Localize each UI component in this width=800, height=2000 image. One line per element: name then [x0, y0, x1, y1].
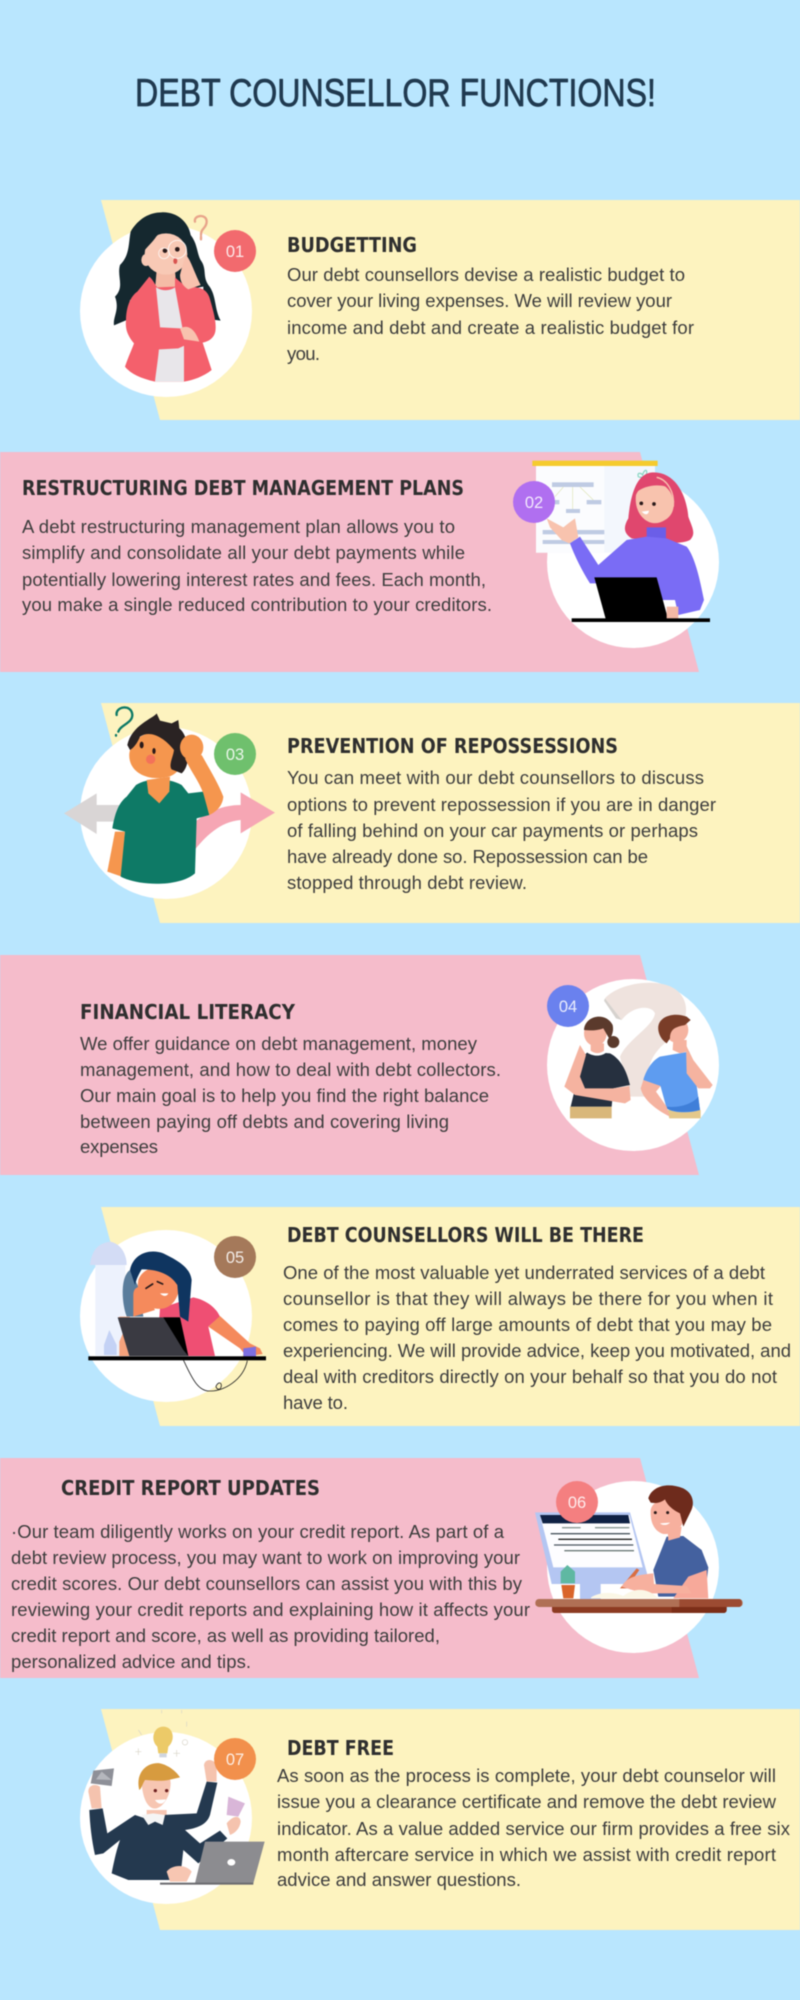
badge 01: 01 [226, 243, 244, 261]
badge 03 [214, 733, 256, 775]
heading: BUDGETTING [287, 233, 417, 257]
white circle [80, 727, 252, 899]
badge 07: 07 [226, 1751, 244, 1769]
body text [287, 264, 694, 364]
body text: expenses [80, 1136, 158, 1157]
body text: issue you a clearance certificate and remove the debt review [277, 1791, 777, 1812]
icon: multitasking man [88, 1710, 265, 1885]
panel: financial literacy [0, 955, 719, 1175]
white circle [547, 476, 719, 648]
icon: boy at crossroads [64, 707, 275, 884]
body text [283, 1262, 791, 1413]
body text: credit report and score, as well as providing tailored, [11, 1625, 440, 1646]
heading: CREDIT REPORT UPDATES [61, 1476, 320, 1500]
heading: PREVENTION OF REPOSSESSIONS [287, 734, 618, 758]
body text: credit scores. Our debt counsellors can assist you with this by [11, 1573, 523, 1594]
body text [277, 1765, 791, 1890]
panel: credit report updates [0, 1458, 743, 1678]
panel background [101, 703, 800, 923]
panel: restructuring [0, 452, 719, 672]
body text: month aftercare service in which we assist with credit report [277, 1844, 776, 1865]
body text: you make a single reduced contribution to your creditors. [22, 594, 492, 615]
badge 07 [214, 1738, 256, 1780]
panel background [101, 200, 800, 420]
body text: stopped through debt review. [287, 872, 527, 893]
panel background [0, 452, 699, 672]
body text [22, 516, 492, 615]
panel background [101, 1709, 800, 1930]
body text: reviewing your credit reports and explaining how it affects your [11, 1599, 530, 1620]
badge 01 [214, 230, 256, 272]
body text: debt review process, you may want to work on improving your [11, 1547, 520, 1568]
badge 04 [547, 985, 589, 1027]
panel background [101, 1207, 800, 1426]
heading: DEBT FREE [287, 1736, 394, 1760]
panel background [0, 955, 699, 1175]
white circle [547, 979, 719, 1151]
body text: counsellor is that they will always be there for you when it [283, 1288, 773, 1309]
body text: between paying off debts and covering living [80, 1111, 449, 1132]
badge 06 [556, 1481, 598, 1523]
body text: deal with creditors directly on your behalf so that you do not [283, 1366, 777, 1387]
icon: two people with question mark [564, 983, 713, 1118]
body text: Our debt counsellors devise a realistic budget to [287, 264, 685, 285]
body text: income and debt and create a realistic budget for [287, 317, 694, 338]
body text: ·Our team diligently works on your credit report. As part of a [11, 1521, 505, 1542]
body text: potentially lowering interest rates and fees. Each month, [22, 569, 486, 590]
badge 04: 04 [559, 998, 577, 1016]
heading: FINANCIAL LITERACY [80, 1000, 295, 1024]
body text: personalized advice and tips. [11, 1651, 251, 1672]
body text: indicator. As a value added service our firm provides a free six [277, 1818, 791, 1839]
title: DEBT COUNSELLOR FUNCTIONS! [135, 72, 656, 115]
body text: have to. [283, 1392, 348, 1413]
panel: debt free [80, 1709, 800, 1930]
body text: We offer guidance on debt management, money [80, 1033, 478, 1054]
heading: RESTRUCTURING DEBT MANAGEMENT PLANS [22, 476, 464, 500]
heading: DEBT COUNSELLORS WILL BE THERE [287, 1223, 644, 1247]
body text [80, 1033, 501, 1157]
badge 03: 03 [226, 746, 244, 764]
panel: budgetting [80, 200, 800, 420]
body text: management, and how to deal with debt collectors. [80, 1059, 501, 1080]
badge 05: 05 [226, 1249, 244, 1267]
badge 05 [214, 1236, 256, 1278]
body text: simplify and consolidate all your debt payments while [22, 542, 465, 563]
body text: you. [287, 343, 320, 364]
body text: advice and answer questions. [277, 1869, 521, 1890]
body text: comes to paying off large amounts of debt that you may be [283, 1314, 772, 1335]
icon: tired woman at desk [88, 1242, 266, 1391]
body text: options to prevent repossession if you are in danger [287, 794, 716, 815]
white circle [80, 1732, 252, 1904]
icon: man at computer [535, 1485, 743, 1613]
white circle [80, 225, 252, 397]
body text: of falling behind on your car payments or perhaps [287, 820, 698, 841]
body text: Our main goal is to help you find the right balance [80, 1085, 489, 1106]
white circle [547, 1481, 719, 1653]
white circle [80, 1230, 252, 1402]
panel: debt counsellors will be there [80, 1207, 800, 1426]
body text [287, 767, 716, 893]
body text: experiencing. We will provide advice, keep you motivated, and [283, 1340, 791, 1361]
badge 02: 02 [525, 494, 543, 512]
body text: cover your living expenses. We will review your [287, 290, 672, 311]
panel background [0, 1458, 699, 1678]
body text: have already done so. Repossession can be [287, 846, 648, 867]
body text [11, 1521, 530, 1672]
badge 06: 06 [568, 1494, 586, 1512]
panel: prevention of repossessions [64, 703, 800, 923]
body text: One of the most valuable yet underrated services of a debt [283, 1262, 765, 1283]
body text: You can meet with our debt counsellors to discuss [287, 767, 704, 788]
icon: thinking woman [114, 212, 221, 382]
body text: A debt restructuring management plan allows you to [22, 516, 455, 537]
body text: As soon as the process is complete, your debt counselor will [277, 1765, 776, 1786]
badge 02 [513, 481, 555, 523]
icon: presenter with board [532, 461, 710, 622]
